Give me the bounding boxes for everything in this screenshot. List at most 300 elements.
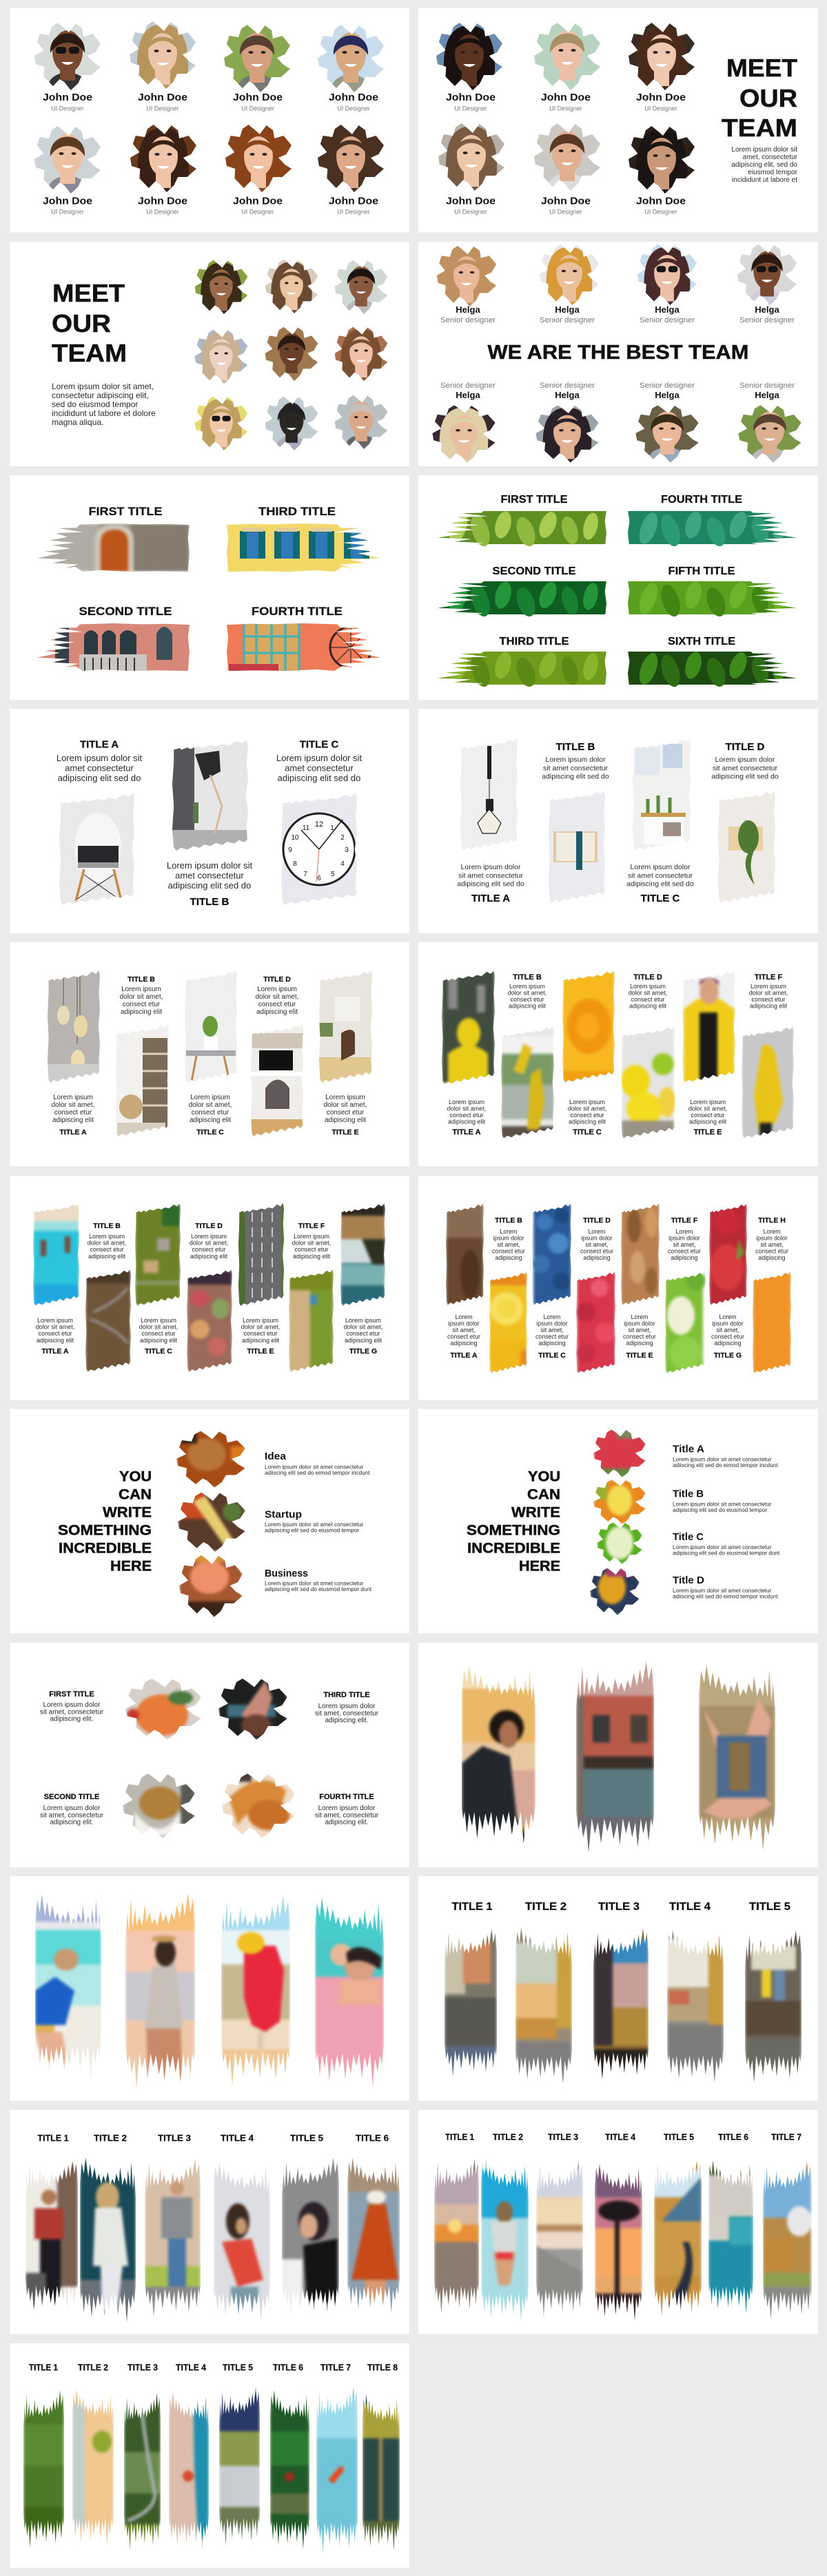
text: title D: sit amet, [585, 1241, 609, 1248]
image: coffee cup [123, 1772, 195, 1838]
text: title H: sit amet, [760, 1241, 784, 1248]
text: title A: TITLE A [41, 1347, 69, 1355]
member 2: John Doe [138, 92, 187, 103]
text: title B: adipiscing elit [121, 1008, 162, 1016]
text: title C: Lorem ipsum [569, 1099, 605, 1105]
image: hanging plant [718, 791, 775, 903]
member 7: UI Designer [241, 208, 274, 215]
text: title E: adipiscing elit [325, 1116, 366, 1124]
image: palm silhouette [595, 2163, 642, 2321]
text: title C: adipiscing elit [140, 1337, 178, 1344]
member 3: UI Designer [644, 105, 677, 112]
text: title E: Lorem ipsum [325, 1094, 365, 1101]
panel: five interior strips [10, 942, 409, 1167]
image: sandy beach [72, 2389, 114, 2546]
text block: adipiscing elit, sed do [731, 161, 797, 169]
text: title A: consect etur [449, 1112, 484, 1119]
text: title C: adipiscing elit [190, 1116, 231, 1124]
text: title B: Lorem ipsum dolor sit amet consectetur [673, 1502, 772, 1507]
image: side table [185, 970, 237, 1083]
text: title B [167, 860, 253, 908]
text: title G: TITLE G [714, 1351, 742, 1360]
heading: sixth title: SIXTH TITLE [668, 636, 735, 647]
member 5: UI Designer [51, 208, 84, 215]
panel: three interior brushes [10, 709, 409, 933]
image: yellow hood in mist [742, 1026, 794, 1139]
text: title G: ipsum dolor [712, 1320, 744, 1327]
image: blueberries [532, 1203, 571, 1305]
top members: Senior designer [540, 316, 595, 324]
member 5: John Doe [541, 196, 591, 207]
title row: TITLE 7 [320, 2362, 351, 2372]
image: yellow rose [562, 970, 615, 1083]
title row: TITLE 5 [664, 2132, 694, 2142]
member 3: John Doe [636, 92, 686, 103]
text: title B: dolor sit amet, [88, 1240, 126, 1247]
image: shrimp [125, 1677, 201, 1740]
text: title E: dolor sit amet, [241, 1324, 280, 1331]
member 5: John Doe [43, 196, 92, 207]
member 6: John Doe [636, 196, 686, 207]
image: bookshelf [116, 1024, 169, 1136]
text: title A: ipsum dolor [448, 1320, 480, 1327]
panel: three grilled food flowers [10, 1409, 409, 1634]
text: title A: Title A [673, 1444, 704, 1455]
bottom members: Senior designer [739, 382, 795, 390]
text block [52, 382, 156, 427]
text: title D: adipiscing elit [629, 1003, 667, 1010]
text: title D [580, 1216, 613, 1261]
image: lemons and oranges [489, 1271, 527, 1373]
panel: four fruit flowers [418, 1409, 818, 1634]
image: strawberries [709, 1203, 747, 1305]
image: woman with camera [699, 1665, 775, 1850]
title: TEAM [52, 339, 127, 367]
text: title G [344, 1317, 382, 1355]
member 7: John Doe [233, 196, 283, 207]
image: clock: 7 [303, 871, 307, 878]
text: title A [447, 1313, 480, 1360]
title [722, 54, 797, 142]
text: business: Lorem ipsum dolor sit amet consectetur [265, 1580, 364, 1587]
member 6: UI Designer [146, 208, 179, 215]
title row: TITLE 4 [669, 1901, 711, 1913]
member 5: UI Designer [549, 208, 582, 215]
text: title C: adipiscing elit sed do eiusmod tempor dunt [673, 1550, 780, 1557]
panel: seven aerial strips [10, 1176, 409, 1400]
image: pendant lamp [460, 738, 518, 851]
image: woman in yellow coat [682, 970, 735, 1083]
title row: TITLE 1 [37, 2132, 69, 2143]
text: title C: consect etur [570, 1112, 604, 1119]
text: title C: sit amet, [540, 1327, 564, 1333]
heading: third title: THIRD TITLE [499, 636, 569, 647]
text: idea: Lorem ipsum dolor sit amet consectetur [265, 1464, 364, 1470]
text: title F: Lorem ipsum [751, 983, 786, 990]
text: title D: TITLE D [633, 973, 662, 981]
text: title C: TITLE C [641, 893, 680, 904]
text: title A: consect etur [54, 1109, 92, 1116]
text: title E: TITLE E [331, 1128, 359, 1136]
image: woman in black [282, 2157, 339, 2317]
image: clock: 5 [331, 871, 335, 878]
text: title E: adipiscing elit [689, 1119, 727, 1125]
text: title C: Lorem ipsum dolor sit amet consectetur [673, 1544, 772, 1550]
text: title C [673, 1531, 780, 1557]
text: first title: FIRST TITLE [49, 1690, 94, 1699]
text: third title: THIRD TITLE [323, 1691, 370, 1699]
title [52, 279, 127, 367]
text: title F: dolor sit amet, [292, 1240, 331, 1247]
text: title D: TITLE D [583, 1216, 611, 1225]
title: OUR [52, 309, 111, 337]
member 1: UI Designer [454, 105, 487, 112]
text: title A: Lorem ipsum [53, 1094, 93, 1101]
text: title B: dolor sit amet, [508, 989, 547, 996]
member 4: John Doe [446, 196, 496, 207]
top members: Senior designer [739, 316, 795, 324]
bottom members: Senior designer [440, 382, 496, 390]
image: succulent [438, 652, 606, 687]
text: title E: Lorem ipsum [690, 1099, 726, 1105]
member 5 [534, 122, 600, 215]
text: fourth title: Lorem ipsum dolor [318, 1805, 376, 1812]
member 8 [318, 123, 384, 215]
title row: TITLE 3 [127, 2362, 158, 2372]
heading: fourth title: FOURTH TITLE [252, 605, 343, 618]
title: OUR [739, 84, 797, 112]
text: title A [457, 863, 524, 904]
text: title B [508, 973, 547, 1010]
text: fourth title [315, 1793, 379, 1827]
text: title C: consect etur [535, 1333, 569, 1340]
text: title C [189, 1094, 232, 1136]
title row [37, 2132, 389, 2143]
text block: amet, consectetur [743, 154, 798, 161]
heading: first title: FIRST TITLE [500, 494, 568, 506]
heading: YOU [528, 1468, 560, 1485]
text: title B: adipiscing elit [509, 1003, 547, 1010]
text: title C: adipiscing [538, 1340, 566, 1347]
heading: SOMETHING [467, 1522, 560, 1539]
text: title B: Title B [673, 1488, 704, 1500]
member 2 [130, 20, 196, 112]
image: dense woodland [270, 2390, 309, 2550]
top members: Helga [456, 304, 480, 315]
title row: TITLE 5 [749, 1901, 790, 1913]
bottom members: Senior designer [640, 382, 695, 390]
member 2 [534, 21, 600, 112]
text: startup: Startup [265, 1508, 302, 1521]
text: title G: dolor sit amet, [344, 1324, 382, 1331]
text: title C: dolor sit amet, [189, 1101, 232, 1109]
heading: CAN [527, 1486, 560, 1503]
title row [29, 2362, 398, 2372]
text: title A: Lorem ipsum [449, 1099, 484, 1105]
text: title F: TITLE F [671, 1216, 698, 1225]
image: clock: 3 [345, 846, 349, 854]
bottom members: Helga [456, 390, 480, 400]
member 2: John Doe [541, 92, 591, 103]
heading: YOU [119, 1468, 152, 1485]
text: title C [139, 1317, 178, 1355]
text: title D: Lorem ipsum [257, 986, 297, 993]
text: title E: consect etur [691, 1112, 725, 1119]
panel: six leaf brushes [418, 475, 818, 700]
image: woman in white jacket [80, 2157, 136, 2323]
text: title B [88, 1222, 126, 1260]
title row: TITLE 2 [525, 1901, 566, 1913]
member 7 [225, 123, 292, 215]
image: father and daughter [315, 1898, 384, 2087]
text block: incididunt ut labore et dolore [52, 408, 156, 418]
text: title B: adipiscing elit sed do [542, 773, 609, 781]
title row: TITLE 4 [176, 2362, 206, 2372]
text: title A: TITLE A [450, 1351, 478, 1360]
text: title D: Lorem ipsum dolor sit amet consectetur [673, 1588, 772, 1594]
text: title C: dolor sit amet, [568, 1105, 606, 1112]
image: cobbled street [667, 1930, 724, 2083]
text: title E [623, 1313, 656, 1360]
text: title H: TITLE H [758, 1216, 786, 1225]
text: title B: sit amet, [497, 1241, 520, 1248]
image: green forest [23, 2390, 64, 2548]
title row: TITLE 6 [718, 2132, 748, 2142]
image: lamp [172, 740, 248, 851]
text: title C [535, 1313, 569, 1360]
text: startup [265, 1508, 364, 1533]
text: title G: Lorem [719, 1313, 736, 1320]
image: clock: 1 [330, 824, 334, 832]
text: title G: consect etur [346, 1330, 380, 1337]
text: title C: Lorem [544, 1313, 560, 1320]
text block: incididunt ut labore et [732, 176, 797, 184]
image: raincoat on road [442, 970, 495, 1085]
text: title D: Lorem [589, 1228, 605, 1235]
text: title F [668, 1216, 701, 1261]
panel: four plated food flowers [10, 1643, 409, 1867]
text: title E [241, 1317, 280, 1355]
image: clock: 9 [288, 846, 292, 854]
text: title F: Lorem [676, 1228, 693, 1235]
text: title A: sit amet, [452, 1327, 476, 1333]
text: title H: consect etur [755, 1248, 788, 1255]
text: title C: amet consectetur [285, 763, 354, 773]
image: sunset street [515, 1927, 572, 2084]
text: title G: consect etur [711, 1333, 744, 1340]
text: title A: amet consectetur [65, 763, 134, 773]
text: title A: Lorem ipsum dolor [461, 863, 521, 871]
text: title B: consect etur [492, 1248, 525, 1255]
image: chair [59, 793, 134, 905]
image: road from above [238, 1203, 284, 1306]
image: woman in water [481, 2159, 529, 2323]
text: title A: TITLE A [452, 1128, 481, 1136]
image: hanging bulbs [48, 970, 100, 1083]
text: title A: adiiscing elit sed do eimod tempor incdunt [673, 1462, 778, 1468]
text: title D: dolor sit amet, [256, 993, 298, 1001]
text: title B: TITLE B [495, 1216, 522, 1225]
image: clock [281, 793, 357, 905]
title row: TITLE 6 [273, 2362, 303, 2372]
top members: Senior designer [640, 316, 695, 324]
text: title D: ipsum dolor [581, 1234, 613, 1241]
image: white shelf [633, 738, 691, 851]
image: mother and child [501, 1026, 554, 1139]
text: title D: TITLE D [726, 741, 764, 753]
text: first title [40, 1690, 104, 1723]
image: man on scooter [145, 2159, 201, 2317]
heading: fourth title: FOURTH TITLE [661, 494, 742, 506]
image: teal leaves [628, 511, 797, 547]
panel: seven landscape brushes [418, 2110, 818, 2334]
text: title B: TITLE B [127, 975, 155, 984]
text: title B: TITLE B [190, 896, 229, 908]
text: title H: ipsum dolor [756, 1234, 788, 1241]
panel: nine members with title left [10, 242, 409, 466]
image: rocky sunset [434, 2159, 479, 2314]
text: title D: sit amet consectetur [713, 764, 777, 772]
text: title B [673, 1488, 772, 1513]
member 1 [436, 21, 502, 112]
text: title D: adipiscing [583, 1254, 611, 1261]
heading [467, 1468, 560, 1575]
panel: eight fruit strips [418, 1176, 818, 1400]
heading [58, 1468, 152, 1575]
bottom members [432, 382, 802, 463]
text: title B: adipiscing elit sed do [168, 880, 251, 891]
title row: TITLE 1 [445, 2132, 474, 2142]
text: title C: TITLE C [573, 1128, 602, 1136]
text: title E: TITLE E [694, 1128, 722, 1136]
title row: TITLE 7 [771, 2132, 802, 2142]
text: title E: adipiscing elit [242, 1337, 280, 1344]
title: MEET [726, 54, 797, 82]
text: first title: Lorem ipsum dolor [43, 1701, 101, 1709]
text: title F: adipiscing [671, 1254, 698, 1261]
member 2: UI Designer [549, 105, 582, 112]
image: white cliffs [708, 2160, 753, 2314]
top members [437, 243, 797, 324]
text: title A [57, 738, 143, 783]
text: title A: adipiscing elit sed do [457, 880, 524, 889]
title row: TITLE 1 [29, 2362, 58, 2372]
text: idea: Idea [265, 1451, 287, 1462]
text: title D: Lorem ipsum [191, 1233, 227, 1240]
text: title B [120, 975, 163, 1016]
panel: eight team members [10, 8, 409, 233]
heading: CAN [119, 1486, 152, 1503]
text: title A: TITLE A [471, 893, 510, 904]
text: title D [629, 973, 667, 1010]
image: man in red shirt [25, 2159, 78, 2314]
image: green field with houses [135, 1203, 181, 1306]
text: title D: dolor sit amet, [629, 989, 667, 996]
title: MEET [52, 279, 125, 307]
heading: SOMETHING [58, 1522, 152, 1539]
text: title F: TITLE F [298, 1222, 325, 1230]
text: second title: adipiscing elit. [50, 1819, 93, 1827]
bottom members: Helga [655, 390, 680, 400]
text: title A: Lorem [456, 1313, 472, 1320]
image: citrus [593, 1479, 646, 1524]
top members: Helga [755, 304, 779, 315]
bottom members: Senior designer [540, 382, 595, 390]
text: title C: Lorem ipsum [141, 1317, 176, 1324]
text: title F: TITLE F [755, 973, 782, 981]
member 6: John Doe [138, 196, 187, 207]
text: title E [324, 1094, 367, 1136]
text: second title: sit amet, consectetur [40, 1811, 104, 1819]
image: green apple [597, 1521, 642, 1564]
text: title D [673, 1575, 778, 1599]
member 1 [34, 21, 101, 112]
member 3 [629, 21, 695, 112]
text: title B: Lorem ipsum [509, 983, 545, 990]
top members: Senior designer [440, 316, 496, 324]
image: forest road [124, 2393, 161, 2550]
image: sliced steak [218, 1677, 287, 1740]
text: title B: consect etur [90, 1246, 124, 1253]
image: yellow wall with windows [227, 523, 380, 572]
image: palms and sand [289, 1269, 334, 1372]
panel: three large brush portraits [418, 1643, 818, 1867]
image: salmon [179, 1554, 243, 1617]
text: title F: adipiscing elit [293, 1253, 331, 1260]
title row: TITLE 4 [605, 2132, 635, 2142]
text: title A: consect etur [447, 1333, 480, 1340]
text: title F: sit amet, [673, 1241, 696, 1248]
text: title A [36, 1317, 74, 1355]
text: title F [292, 1222, 331, 1260]
text: title G [711, 1313, 744, 1360]
image: coffee beans [446, 1203, 484, 1305]
text: business [265, 1568, 372, 1592]
text: title D: consect etur [631, 996, 665, 1003]
image: woman in red top [214, 2161, 270, 2321]
panel: six people brushes [10, 2110, 409, 2334]
image: pink sand and sea [169, 2391, 209, 2550]
image: desk [251, 1024, 303, 1136]
image: stairs alley [445, 1929, 497, 2077]
text: title C: adipiscing elit [569, 1119, 606, 1125]
text: title D: adiiscing elit sed do eimod tempor incdunt [673, 1594, 778, 1599]
text: title E: dolor sit amet, [688, 1105, 727, 1112]
title row: TITLE 3 [158, 2132, 191, 2143]
text: third title: adipiscing elit. [325, 1717, 368, 1725]
image: woman in orange dress [347, 2157, 400, 2314]
image: boats on turquoise water [33, 1203, 79, 1306]
text: title A: adipiscing [450, 1340, 478, 1347]
text: business: adipiscing elit sed do eiusmod tempor dunt [265, 1586, 372, 1592]
text: title D [190, 1222, 228, 1260]
text: title F: consect etur [668, 1248, 701, 1255]
text: fourth title: FOURTH TITLE [319, 1793, 374, 1801]
heading: HERE [519, 1558, 560, 1575]
text: title E: dolor sit amet, [324, 1101, 367, 1109]
title row: TITLE 1 [452, 1901, 493, 1913]
member 4: John Doe [329, 92, 378, 103]
image: clock: 12 [315, 820, 323, 829]
text: title G: adipiscing [714, 1340, 742, 1347]
text: title A: TITLE A [80, 738, 119, 751]
text: title G: adipiscing elit [345, 1337, 382, 1344]
text: title E: Lorem [631, 1313, 648, 1320]
image: chair by wall [319, 970, 372, 1083]
image: woman in hat [125, 1893, 195, 2088]
title: TEAM [722, 114, 797, 142]
text: title C: adipiscing elit sed do [626, 880, 694, 889]
